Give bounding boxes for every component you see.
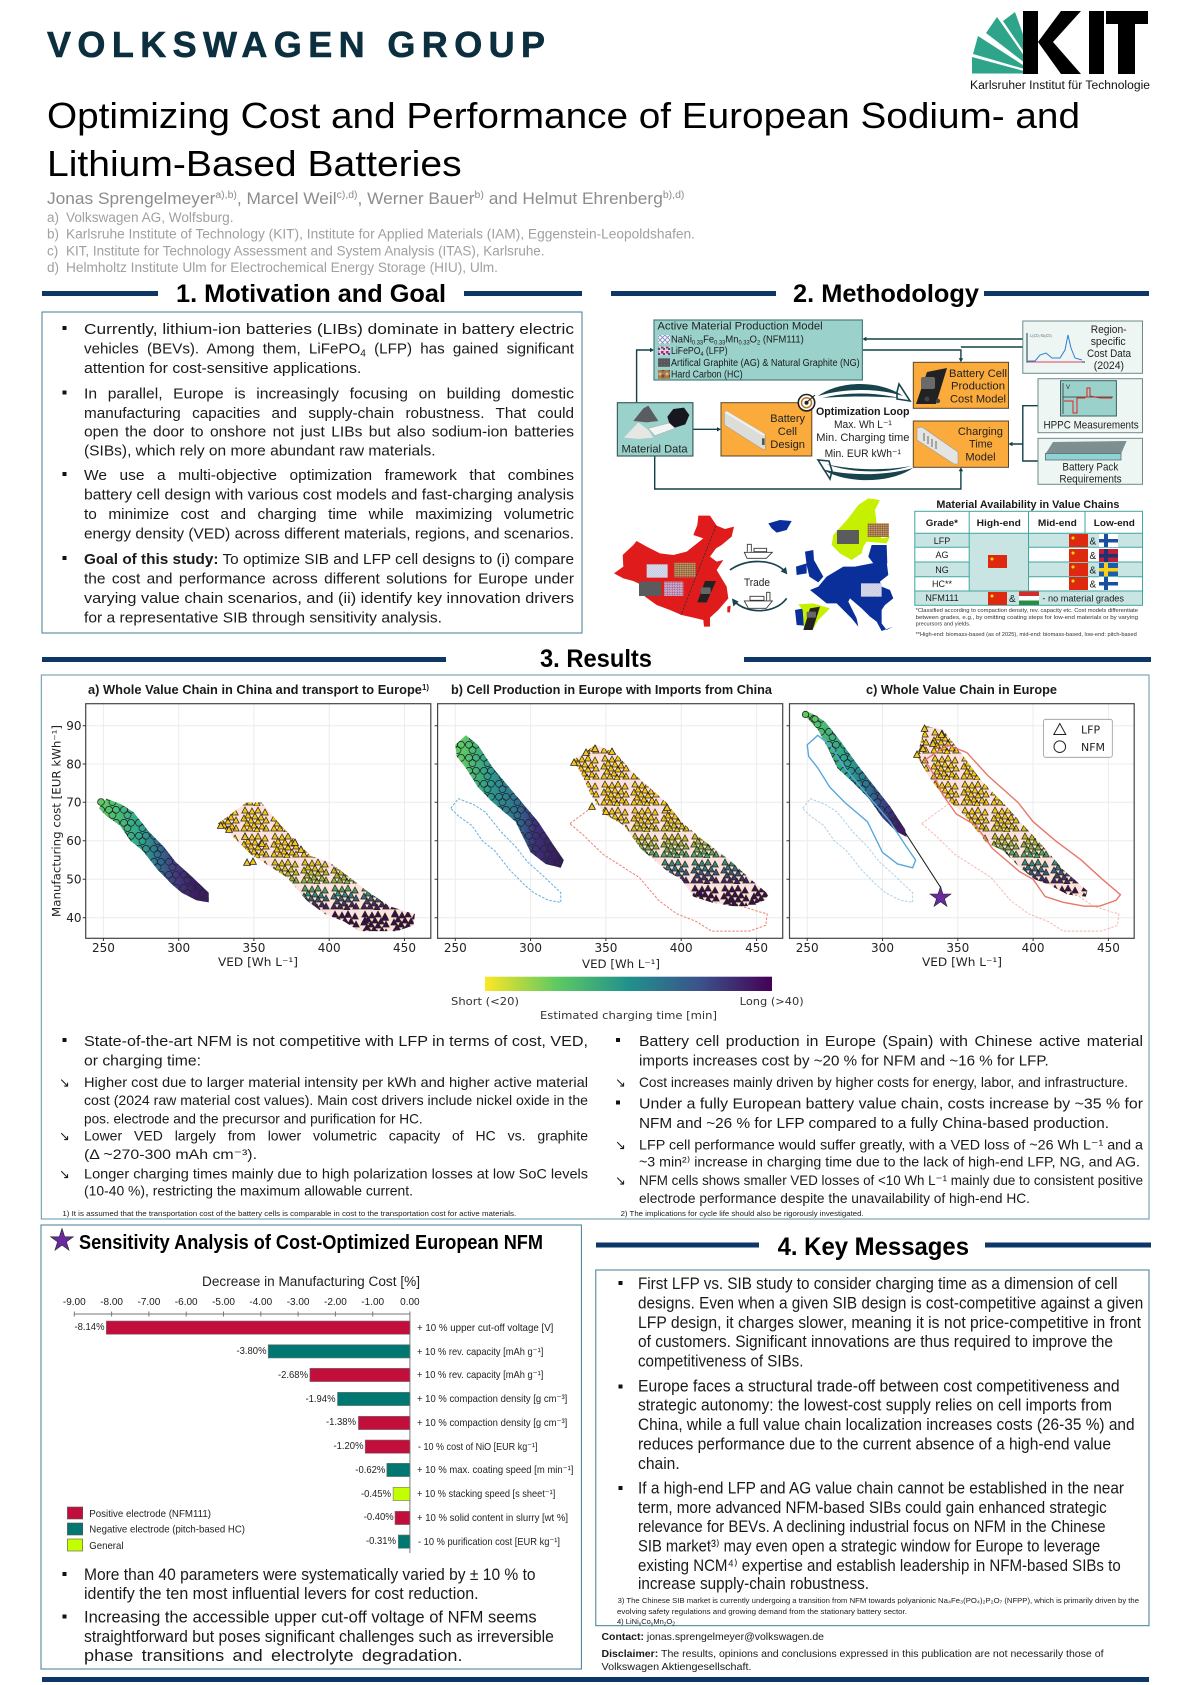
- table: material availability in value chains: Low-end: [1094, 518, 1135, 529]
- chart: a) whole value chain in China: VED [Wh L⁻¹]: [218, 955, 298, 969]
- table footnotes: between grades, e.g., by omitting coating steps for low-end materials or by varying: [916, 615, 1138, 621]
- bar chart: decrease in manufacturing cost: + 10 % compaction density [g cm⁻³]: [417, 1393, 567, 1405]
- logo: KIT: Karlsruher Institut für Technologie: [970, 80, 1150, 92]
- box: active material production model: O: [750, 334, 757, 346]
- box: active material production model: NaNi: [671, 334, 693, 346]
- authors: b),d): [663, 190, 684, 201]
- bar chart: decrease in manufacturing cost: -9.00: [63, 1297, 86, 1308]
- disclaimer: [602, 1648, 1104, 1673]
- icon: target: [798, 394, 815, 411]
- chart: a) whole value chain in China: 50: [66, 873, 82, 887]
- panel: motivation and goal: to minimize cost and charging time while maximizing volumetric: [84, 506, 575, 523]
- table: material availability in value chains: High-end: [977, 518, 1021, 529]
- authors: and Helmut Ehrenberg: [484, 190, 663, 208]
- box: region-specific cost data: Cost Data: [1087, 348, 1132, 360]
- box: region-specific cost data: Li₂CO₃ Na₂CO₃: [1030, 333, 1052, 338]
- heading: 3. Results: 3. Results: [540, 645, 652, 673]
- bar chart: decrease in manufacturing cost: -3.80%: [236, 1345, 266, 1357]
- bar chart: decrease in manufacturing cost: + 10 % upper cut-off voltage [V]: [417, 1322, 553, 1334]
- text: results left column: or charging time:: [84, 1052, 201, 1069]
- box: battery cell design: Battery: [770, 413, 805, 425]
- chart: a) whole value chain in China: Manufacturing cost [EUR kWh⁻¹]: [50, 725, 64, 917]
- text: results left column: ↘: [59, 1130, 70, 1145]
- legend: electrode categories: Negative electrode (pitch-based HC): [89, 1524, 245, 1536]
- text: results right column: ↘: [615, 1076, 626, 1091]
- authors: c),d): [337, 190, 358, 201]
- panel: sensitivity analysis: [41, 1225, 581, 1669]
- heading: 4. Key Messages: 4. Key Messages: [778, 1233, 969, 1261]
- box: battery cell production cost model: Production: [951, 380, 1005, 392]
- text: results right column: [615, 1033, 1143, 1218]
- text: sensitivity findings: [62, 1566, 554, 1665]
- box: charging time model: [913, 421, 1008, 467]
- panel: key messages: term, more advanced NFM-based SIBs could gain enhanced strategic: [638, 1499, 1107, 1517]
- box: battery pack requirements: Battery Pack: [1062, 462, 1119, 474]
- chart: c) whole value chain in Europe: VED [Wh L⁻¹]: [922, 955, 1002, 969]
- footnotes: key messages: 3) The Chinese SIB market is currently undergoing a transition from NFM towards polyanionic Na₄Fe₃(PO₄)₂P₂O₇ (NFPP), which is primarily driven by the: [618, 1596, 1139, 1605]
- heading: 2. Methodology: [611, 280, 1149, 308]
- box: battery cell production cost model: Battery Cell: [949, 368, 1007, 380]
- chart: a) whole value chain in China: a) Whole Value Chain in China and transport to Europe: [88, 682, 426, 697]
- text: results right column: electrode performance despite the unavailability of high-end HC.: [639, 1190, 1030, 1206]
- box: active material production model: Mn: [725, 334, 738, 346]
- affiliations: b): [47, 226, 59, 242]
- panel: key messages: designs. Even when a given SIB design is cost-competitive against a given: [638, 1294, 1143, 1312]
- bar chart: decrease in manufacturing cost: -0.45%: [361, 1488, 391, 1500]
- authors: , Marcel Weil: [237, 190, 337, 208]
- panel: motivation and goal: (SIBs), which rely on more abundant raw materials.: [84, 443, 436, 460]
- table: material availability in value chains: NFM111: [925, 593, 959, 603]
- panel: key messages: existing NCM⁴⁾ expertise and establish leadership in NFM-based SIBs to: [638, 1557, 1121, 1575]
- text: results right column: NFM and ~26 % for LFP compared to a fully China-based production.: [639, 1115, 1109, 1132]
- text: results right column: ~3 min²⁾ increase in charging time due to the lack of high-end LFP, NG, and AG.: [639, 1154, 1140, 1170]
- panel: motivation and goal: We use a multi-objective optimization framework that combines: [84, 467, 574, 484]
- box: material data: [617, 403, 693, 456]
- chart: a) whole value chain in China: 250: [92, 941, 115, 955]
- optimization loop arrows: [818, 384, 913, 480]
- table: material availability in value chains: &: [1090, 566, 1096, 576]
- box: active material production model: 0.33: [714, 340, 726, 346]
- text: results left column: cost (2024 raw material cost values). Main cost drivers include nickel oxide in the: [84, 1092, 588, 1108]
- title: [47, 95, 1080, 184]
- scatter: NFM b: [455, 735, 564, 868]
- footnotes: key messages: 4) LiNi: [617, 1617, 639, 1626]
- footnotes: key messages: [617, 1596, 1139, 1628]
- bar chart: decrease in manufacturing cost: -1.00: [361, 1297, 385, 1308]
- box: active material production model: (LFP): [703, 346, 728, 357]
- text: results right column: ↘: [615, 1138, 626, 1153]
- connector arrows: [637, 337, 1038, 489]
- box: active material production model: [654, 320, 862, 380]
- table: material availability in value chains: AG: [935, 550, 949, 560]
- disclaimer: Disclaimer: The results, opinions and conclusions expressed in this publication are not necessarily those of: [602, 1648, 1104, 1660]
- map: Europe: [768, 498, 893, 631]
- text: results left column: State-of-the-art NFM is not competitive with LFP in terms of cost, VED,: [84, 1033, 588, 1050]
- box: active material production model: 2: [757, 340, 761, 346]
- flags: [988, 534, 1118, 605]
- scatter: LFP b: [572, 744, 768, 906]
- panel: key messages: [596, 1270, 1149, 1628]
- logo: KIT: [970, 11, 1150, 92]
- box: charging time model: Time: [969, 438, 993, 450]
- panel: motivation and goal: attention for cost-sensitive applications.: [84, 360, 361, 377]
- colorbar: estimated charging time: [451, 977, 804, 1022]
- bar chart: decrease in manufacturing cost: -2.68%: [278, 1369, 308, 1381]
- bar chart: decrease in manufacturing cost: -1.20%: [334, 1440, 364, 1452]
- bar chart: decrease in manufacturing cost: -8.00: [100, 1297, 123, 1308]
- chart: b) cell production in Europe: 300: [519, 941, 542, 955]
- panel: motivation and goal: varying value chain scenarios, and (ii) identify key innovation drivers: [84, 590, 574, 607]
- panel: key messages: competitiveness of SIBs.: [638, 1352, 803, 1370]
- scatter: LFP c: [918, 726, 1088, 897]
- legend: electrode categories: [67, 1507, 245, 1552]
- affiliations: KIT, Institute for Technology Assessment and System Analysis (ITAS), Karlsruhe.: [66, 244, 544, 258]
- text: results left column: (Δ ~270-300 mAh cm⁻³).: [84, 1146, 257, 1162]
- text: results right column: Battery cell production in Europe (Spain) with Chinese active material: [639, 1033, 1143, 1050]
- panel: motivation and goal: Currently, lithium-ion batteries (LIBs) dominate in battery electric: [84, 321, 575, 338]
- bar chart: decrease in manufacturing cost: 0.00: [400, 1297, 420, 1308]
- panel: key messages: strategic autonomy: the lowest-cost supply relies on cell imports from: [638, 1397, 1112, 1415]
- chart: a) whole value chain in China: 70: [66, 796, 82, 810]
- panel: motivation and goal: (LFP) has gained significant: [366, 340, 575, 358]
- chart: a) whole value chain in China: 1): [422, 683, 429, 692]
- affiliations: c): [47, 244, 58, 258]
- chart: a) whole value chain in China: [50, 682, 431, 969]
- bar chart: decrease in manufacturing cost: -0.40%: [364, 1511, 394, 1523]
- bar chart: decrease in manufacturing cost: - 10 % purification cost [EUR kg⁻¹]: [418, 1536, 560, 1548]
- heading: 1. Motivation and Goal: [42, 280, 582, 308]
- box: active material production model: 0.33: [692, 340, 704, 346]
- bar chart: decrease in manufacturing cost: -3.00: [287, 1297, 310, 1308]
- table footnotes: **High-end: biomass-based (as of 2025), mid-end: biomass-based, low-end: pitch-based: [916, 632, 1137, 638]
- table: material availability in value chains: NG: [935, 565, 949, 575]
- table: material availability in value chains: [915, 499, 1142, 605]
- panel: key messages: First LFP vs. SIB study to consider charging time as a dimension of cell: [638, 1275, 1118, 1293]
- text: results left column: 1) It is assumed that the transportation cost of the battery cells is comparable in cost to the transportation cost for active materials.: [62, 1209, 516, 1218]
- affiliations: a): [47, 210, 59, 225]
- chart: b) cell production in Europe: 400: [670, 941, 693, 955]
- footnotes: key messages: Co: [641, 1617, 651, 1626]
- panel: results: [41, 675, 1149, 1219]
- affiliations: Karlsruhe Institute of Technology (KIT), Institute for Applied Materials (IAM), Eggenstein-Leopoldshafen.: [66, 226, 695, 242]
- table footnotes: precursors and yields.: [916, 622, 971, 628]
- line to star marker: [906, 833, 951, 906]
- panel: key messages: LFP design, it charges slower, meaning it is not price-competitive in front: [638, 1314, 1141, 1332]
- authors: a),b): [215, 190, 237, 201]
- legend: electrode categories: General: [89, 1540, 124, 1552]
- panel: motivation and goal: open the door to onshore not just LIBs but also sodium-ion batteries: [84, 424, 574, 440]
- text: optimization loop: Optimization Loop: [816, 406, 910, 418]
- box: region-specific cost data: [1023, 321, 1142, 373]
- box: battery cell design: Design: [770, 439, 805, 451]
- text: results right column: Cost increases mainly driven by higher costs for energy, labor, and infrastructure.: [639, 1074, 1128, 1090]
- text: optimization loop: Min. Charging time: [816, 432, 910, 444]
- scatter: NFM a: [99, 798, 209, 902]
- box: battery pack requirements: Requirements: [1059, 474, 1122, 486]
- panel: key messages: SIB market³⁾ may even open a strategic window for Europe to leverage: [638, 1538, 1100, 1556]
- panel: motivation and goal: battery cell design with various cost models and fast-charging analysis: [84, 487, 574, 504]
- text: results right column: NFM cells shows smaller VED losses of <10 Wh L⁻¹ mainly due to consistent positive: [639, 1172, 1143, 1188]
- bar chart: decrease in manufacturing cost: -0.31%: [366, 1535, 396, 1547]
- chart: a) whole value chain in China: 400: [318, 941, 341, 955]
- panel: key messages: chain.: [638, 1455, 680, 1473]
- box: active material production model: LiFePO: [671, 346, 704, 357]
- table: material availability in value chains: - no material grades: [1042, 594, 1125, 604]
- chart: a) whole value chain in China: 450: [393, 941, 416, 955]
- outlier markers c: [802, 711, 945, 757]
- colorbar: estimated charging time: Long (>40): [740, 995, 804, 1008]
- previous outlines c (faded): [803, 799, 1119, 931]
- bar chart: decrease in manufacturing cost: -7.00: [138, 1297, 161, 1308]
- bar chart: decrease in manufacturing cost: - 10 % cost of NiO [EUR kg⁻¹]: [418, 1441, 538, 1453]
- text: results left column: Lower VED largely from lower volumetric capacity of HC vs. graphite: [84, 1128, 588, 1144]
- footnotes: key messages: evolving safety regulations and growing demand from the stationary battery sector.: [617, 1607, 907, 1616]
- affiliations: Volkswagen AG, Wolfsburg.: [66, 210, 234, 225]
- table: material availability in value chains: &: [1090, 551, 1096, 562]
- chart: c) whole value chain in Europe: 450: [1097, 941, 1120, 955]
- chart: b) cell production in Europe: VED [Wh L⁻¹]: [582, 957, 660, 971]
- chart: a) whole value chain in China: 60: [66, 834, 82, 848]
- colorbar: estimated charging time: Estimated charging time [min]: [540, 1009, 717, 1022]
- outlier markers b: [571, 745, 755, 904]
- title: Optimizing Cost and Performance of European Sodium- and: [47, 95, 1080, 136]
- heading: 4. Key Messages: [596, 1233, 1151, 1261]
- chart: b) cell production in Europe: 350: [594, 941, 617, 955]
- box: material data: Material Data: [622, 444, 688, 456]
- panel: key messages: relevance for BEVs. A declining industrial focus on NFM in the Chinese: [638, 1518, 1106, 1536]
- affiliations: d): [47, 260, 59, 275]
- authors: [47, 190, 684, 208]
- footnotes: key messages: O: [666, 1617, 672, 1626]
- text: sensitivity findings: phase transitions and electrolyte degradation.: [84, 1647, 462, 1665]
- text: results right column: Under a fully European battery value chain, costs increase by ~35 % for: [639, 1096, 1143, 1112]
- panel: motivation and goal: Goal of this study: To optimize SIB and LFP cell designs to (i) compare: [84, 551, 574, 568]
- colorbar: estimated charging time: Short (<20): [451, 995, 519, 1008]
- panel: key messages: increase supply-chain robustness.: [638, 1575, 869, 1593]
- chart: c) whole value chain in Europe: 300: [871, 941, 894, 955]
- text: optimization loop: [816, 406, 910, 460]
- text: sensitivity findings: Increasing the accessible upper cut-off voltage of NFM seems: [84, 1608, 537, 1626]
- bar chart: decrease in manufacturing cost: -6.00: [175, 1297, 198, 1308]
- footnotes: key messages: 2: [672, 1622, 675, 1628]
- text: results left column: Longer charging times mainly due to high polarization losses at low SoC levels: [84, 1165, 588, 1181]
- chart: a) whole value chain in China: 80: [66, 757, 82, 771]
- scatter: NFM c: [804, 710, 907, 837]
- map: China: [614, 516, 734, 627]
- chart: a) whole value chain in China: 350: [242, 941, 265, 955]
- panel: motivation and goal: the cost and performance across different solutions for Europe under: [84, 571, 574, 588]
- text: results left column: [59, 1033, 588, 1218]
- legend: markers: LFP: [1081, 724, 1100, 736]
- text: results left column: ↘: [59, 1167, 70, 1182]
- footnotes: key messages: y: [651, 1622, 654, 1628]
- heading: sensitivity analysis: Sensitivity Analysis of Cost-Optimized European NFM: [79, 1232, 543, 1254]
- chart: a) whole value chain in China: 40: [66, 911, 82, 925]
- text: results left column: (10-40 %), restricting the maximum allowable current.: [84, 1183, 413, 1199]
- bar chart: decrease in manufacturing cost: Decrease in Manufacturing Cost [%]: [202, 1274, 420, 1289]
- panel: motivation and goal: manufacturing capacities and supply-chain robustness. That could: [84, 405, 574, 422]
- chart: b) cell production in Europe: 250: [444, 941, 467, 955]
- text: results right column: 2) The implications for cycle life should also be rigorously investigated.: [621, 1209, 864, 1218]
- box: battery cell design: [721, 403, 812, 456]
- affiliations: Helmholtz Institute Ulm for Electrochemical Energy Storage (HIU), Ulm.: [66, 260, 498, 275]
- table: material availability in value chains: &: [1009, 594, 1016, 605]
- text: sensitivity findings: More than 40 parameters were systematically varied by ± 10 % to: [84, 1566, 536, 1584]
- panel: key messages: reduces performance due to the current absence of a high-end value: [638, 1435, 1111, 1453]
- chart: a) whole value chain in China: 300: [167, 941, 190, 955]
- text: optimization loop: Min. EUR kWh⁻¹: [825, 448, 901, 460]
- table: material availability in value chains: &: [1090, 580, 1096, 590]
- bar chart: decrease in manufacturing cost: + 10 % solid content in slurry [wt %]: [417, 1512, 568, 1524]
- legend: markers: NFM: [1081, 741, 1105, 754]
- bar chart: decrease in manufacturing cost: + 10 % rev. capacity [mAh g⁻¹]: [417, 1346, 543, 1358]
- panel: key messages: China, while a full value chain localization increases costs (26-35 %) and: [638, 1416, 1135, 1434]
- text: optimization loop: Max. Wh L⁻¹: [834, 419, 892, 431]
- affiliations: [47, 210, 695, 275]
- flow diagram: methodology: [617, 320, 1142, 489]
- bar chart: decrease in manufacturing cost: -5.00: [212, 1297, 235, 1308]
- panel: key messages: Europe faces a structural trade-off between cost competitiveness and: [638, 1377, 1120, 1395]
- outlier markers a: [98, 799, 398, 923]
- bar chart: decrease in manufacturing cost: -8.14%: [74, 1321, 104, 1333]
- box: active material production model: 4: [700, 352, 704, 358]
- panel: motivation and goal: vehicles (BEVs). Among them, LiFePO: [84, 340, 358, 358]
- heading: 3. Results: [42, 645, 1151, 673]
- logo: Volkswagen Group: VOLKSWAGEN GROUP: [47, 24, 545, 65]
- bar chart: decrease in manufacturing cost: -2.00: [324, 1297, 347, 1308]
- panel: motivation and goal: [42, 312, 582, 633]
- panel: motivation and goal: energy density (VED) across different materials, regions, and scenarios.: [84, 526, 574, 542]
- chart: c) whole value chain in Europe: [786, 682, 1135, 969]
- bar chart: decrease in manufacturing cost: + 10 % stacking speed [s sheet⁻¹]: [417, 1488, 555, 1500]
- box: active material production model: Hard Carbon (HC): [671, 370, 743, 380]
- box: active material production model: 0.33: [738, 340, 750, 346]
- box: active material production model: Fe: [703, 334, 715, 346]
- footnotes: key messages: z: [664, 1622, 667, 1628]
- table: material availability in value chains: Mid-end: [1038, 518, 1077, 529]
- chart: c) whole value chain in Europe: 350: [946, 941, 969, 955]
- table footnotes: *Classified according to compaction density, rev. capacity etc. Cost models differentiate: [916, 608, 1138, 614]
- box: charging time model: Charging: [958, 426, 1003, 438]
- bar chart: decrease in manufacturing cost: + 10 % max. coating speed [m min⁻¹]: [417, 1464, 573, 1476]
- chart: b) cell production in Europe: [435, 682, 783, 971]
- trade arrows and ships: [730, 544, 787, 611]
- authors: b): [475, 190, 484, 201]
- icon: star: [51, 1228, 73, 1250]
- text: results right column: imports increases cost by ~20 % for NFM and ~16 % for LFP.: [639, 1052, 1049, 1069]
- heading: 2. Methodology: 2. Methodology: [793, 280, 979, 308]
- text: sensitivity findings: straightforward but poses significant challenges such as irreversible: [84, 1628, 554, 1646]
- chart: b) cell production in Europe: b) Cell Production in Europe with Imports from China: [451, 682, 773, 697]
- table footnotes: [916, 608, 1138, 638]
- table: material availability in value chains: Grade*: [926, 518, 958, 529]
- box: battery pack requirements: [1038, 438, 1142, 486]
- bar chart: decrease in manufacturing cost: + 10 % rev. capacity [mAh g⁻¹]: [417, 1369, 543, 1381]
- text: results left column: pos. electrode and the precursor and purification for HC.: [84, 1110, 423, 1126]
- text: results left column: Higher cost due to larger material intensity per kWh and higher active material: [84, 1074, 588, 1090]
- box: HPPC measurements: HPPC Measurements: [1044, 420, 1139, 432]
- box: region-specific cost data: Region-: [1091, 324, 1127, 336]
- footnotes: key messages: Mn: [653, 1617, 664, 1626]
- box: active material production model: (NFM111): [760, 334, 804, 346]
- bar chart: decrease in manufacturing cost: -0.62%: [355, 1464, 385, 1476]
- previous outlines c (solid): [807, 735, 1120, 906]
- footnotes: key messages: x: [639, 1622, 642, 1628]
- box: battery cell production cost model: [913, 362, 1008, 408]
- trade arrows and ships: Trade: [744, 577, 770, 589]
- panel: motivation and goal: for a representative SIB through sensitivity analysis.: [84, 609, 442, 626]
- chart: c) whole value chain in Europe: c) Whole Value Chain in Europe: [866, 682, 1057, 697]
- box: active material production model: Artifical Graphite (AG) & Natural Graphite (NG): [671, 358, 860, 369]
- authors: Jonas Sprengelmeyer: [47, 190, 208, 208]
- chart: c) whole value chain in Europe: 400: [1022, 941, 1045, 955]
- panel: motivation and goal: In parallel, Europe is increasingly focusing on building domestic: [84, 386, 575, 403]
- legend: electrode categories: Positive electrode (NFM111): [89, 1508, 211, 1520]
- heading: 1. Motivation and Goal: 1. Motivation and Goal: [176, 280, 446, 308]
- text: sensitivity findings: identify the ten most influential levers for cost reduction.: [84, 1585, 479, 1603]
- table: material availability in value chains: Material Availability in Value Chains: [936, 499, 1119, 511]
- bar chart: decrease in manufacturing cost: + 10 % compaction density [g cm⁻³]: [417, 1417, 567, 1429]
- box: battery cell production cost model: Cost Model: [950, 394, 1006, 406]
- legend: markers: [1044, 719, 1112, 757]
- chart: c) whole value chain in Europe: 250: [796, 941, 819, 955]
- previous outlines b: [451, 799, 767, 931]
- text: results right column: LFP cell performance would suffer greatly, with a VED loss of ~26 Wh L⁻¹ and a: [639, 1136, 1143, 1152]
- chart: b) cell production in Europe: 450: [745, 941, 768, 955]
- text: results left column: ↘: [59, 1076, 70, 1091]
- panel: key messages: If a high-end LFP and AG value chain cannot be established in the near: [638, 1480, 1124, 1498]
- table: material availability in value chains: LFP: [934, 536, 950, 546]
- panel: motivation and goal: 4: [360, 348, 366, 360]
- chart: a) whole value chain in China: 90: [66, 719, 82, 733]
- panel: key messages: of customers. Significant innovations are thus required to improve the: [638, 1333, 1113, 1351]
- box: battery cell design: Cell: [778, 426, 797, 438]
- box: region-specific cost data: specific: [1091, 336, 1126, 348]
- authors: , Werner Bauer: [358, 190, 475, 208]
- bar chart: decrease in manufacturing cost: -4.00: [249, 1297, 273, 1308]
- table: material availability in value chains: HC**: [932, 579, 952, 589]
- box: HPPC measurements: [1038, 379, 1142, 433]
- box: region-specific cost data: (2024): [1094, 360, 1124, 372]
- box: HPPC measurements: V: [1066, 385, 1070, 391]
- box: charging time model: Model: [965, 452, 996, 464]
- text: results right column: ↘: [615, 1174, 626, 1189]
- contact: Contact: jonas.sprengelmeyer@volkswagen.de: [602, 1631, 824, 1643]
- bar chart: decrease in manufacturing cost: [63, 1274, 573, 1553]
- title: Lithium-Based Batteries: [47, 143, 462, 184]
- disclaimer: Volkswagen Aktiengesellschaft.: [602, 1661, 752, 1673]
- scatter: LFP a: [218, 802, 415, 932]
- box: active material production model: Active Material Production Model: [657, 320, 823, 332]
- bar chart: decrease in manufacturing cost: -1.38%: [326, 1416, 356, 1428]
- bar chart: decrease in manufacturing cost: -1.94%: [306, 1393, 336, 1405]
- table: material availability in value chains: &: [1090, 536, 1096, 548]
